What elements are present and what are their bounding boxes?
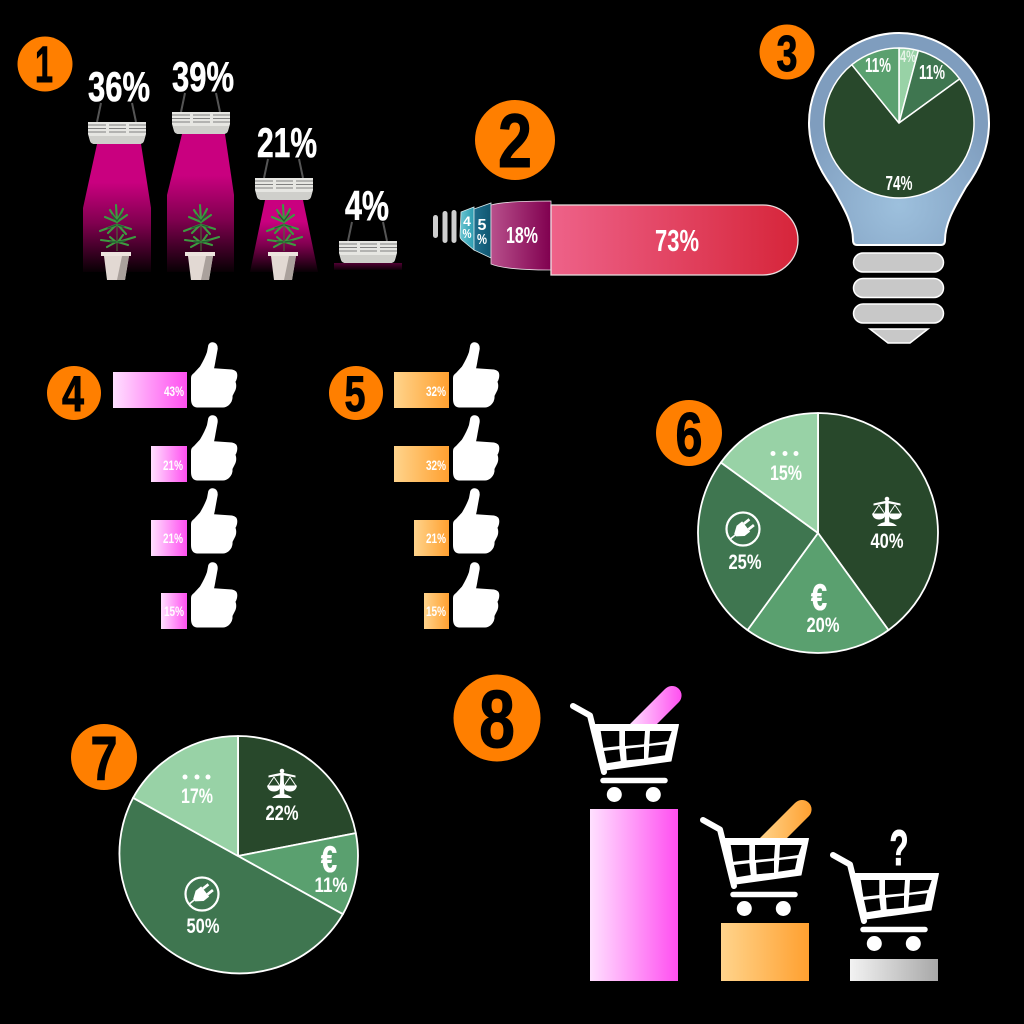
section 2: bulb side view bar: [433, 99, 798, 275]
segment 5%: [474, 203, 491, 258]
row 43%: [113, 342, 237, 408]
slice 20%: 20%: [806, 614, 840, 637]
row 32% second: [394, 415, 499, 482]
slice 25%: 25%: [728, 551, 762, 574]
badge 6: 6: [676, 401, 702, 470]
pink cart column: [573, 686, 682, 981]
badge 5: [329, 366, 383, 422]
bulb pie chart: [824, 48, 974, 198]
segment 73%: 73%: [655, 223, 699, 258]
slice 11%: [314, 839, 348, 897]
bulb labels: 11%: [919, 62, 945, 84]
lamp 39%: 39%: [172, 53, 234, 100]
badge 5: 5: [344, 366, 366, 422]
slice 25%: [726, 512, 762, 574]
lamp 36%: [83, 63, 151, 280]
slice 15%: [770, 451, 802, 485]
badge 7: 7: [90, 725, 118, 794]
lamp 39%: [167, 53, 234, 280]
slice 15%: 15%: [770, 462, 802, 485]
row 43%: 43%: [164, 383, 184, 399]
lamp 4%: 4%: [345, 182, 389, 229]
segment 18%: [491, 201, 551, 270]
row 15%: 15%: [426, 603, 446, 619]
row 15%: [161, 562, 237, 629]
bulb labels: 11%: [865, 55, 891, 77]
bulb labels: 74%: [886, 173, 913, 195]
segment 5%: %: [477, 231, 487, 248]
slice 22%: [266, 769, 299, 825]
badge 8: [454, 674, 540, 765]
segment 4%: 4: [463, 213, 471, 229]
section 6: pie chart: [656, 400, 938, 653]
row 32%: 32%: [426, 383, 446, 399]
row 15%: [424, 562, 499, 629]
lamp 4%: [334, 182, 402, 270]
badge 2: 2: [498, 99, 532, 184]
row 21%: 21%: [426, 530, 446, 546]
row 32%: [394, 342, 499, 408]
bulb labels: 4%: [900, 47, 916, 66]
slice 20%: [806, 577, 840, 637]
row 21%: [151, 415, 237, 482]
lamp 21%: 21%: [257, 119, 317, 166]
section 1: grow lamps: [18, 36, 402, 280]
row 21%: [414, 488, 499, 556]
badge 7: [71, 724, 137, 794]
row 32% second: 32%: [426, 457, 446, 473]
slice 11%: €: [321, 839, 337, 880]
lamp 21%: [250, 119, 318, 280]
slice 40%: 40%: [870, 530, 904, 553]
slice 22%: 22%: [266, 802, 299, 825]
lamp 36%: 36%: [88, 63, 150, 110]
segment 73%: [551, 205, 798, 275]
segment 18%: 18%: [506, 222, 538, 248]
row 21% second: [151, 488, 237, 556]
badge 4: 4: [62, 366, 84, 422]
orange cart column: [703, 800, 812, 981]
badge 3: 3: [776, 25, 798, 82]
badge 6: [656, 400, 722, 470]
badge 4: [47, 366, 101, 422]
grey cart column: ?: [890, 820, 908, 876]
section 3: light bulb pie: [760, 24, 989, 343]
slice 20%: €: [811, 577, 827, 618]
badge 2: [475, 99, 555, 184]
slice 50%: 50%: [186, 915, 220, 938]
bulb labels: [865, 47, 945, 195]
slice 11%: 11%: [314, 874, 348, 897]
segment 4%: %: [462, 226, 472, 241]
bulb glass: [809, 33, 989, 245]
section 8: shopping carts: [454, 674, 938, 981]
row 21% second: 21%: [163, 530, 183, 546]
grey cart column: [833, 820, 938, 981]
slice 17%: [181, 774, 213, 808]
section 5: orange thumbs: [329, 342, 499, 629]
badge 3: [760, 24, 814, 82]
badge 8: 8: [479, 674, 515, 765]
segment 4%: [460, 207, 474, 250]
section 4: pink thumbs: [47, 342, 237, 629]
badge 1: [18, 36, 72, 93]
row 21%: 21%: [163, 457, 183, 473]
pie wedges: [119, 736, 358, 973]
row 15%: 15%: [164, 603, 184, 619]
base ribs: [433, 210, 456, 243]
segment 5%: 5: [478, 217, 487, 234]
bulb screw base: [854, 253, 944, 343]
slice 17%: 17%: [181, 785, 213, 808]
slice 40%: [870, 497, 904, 553]
section 7: pie chart: [71, 724, 358, 973]
pie wedges: [698, 413, 938, 653]
slice 50%: [185, 878, 220, 938]
badge 1: 1: [35, 36, 53, 93]
